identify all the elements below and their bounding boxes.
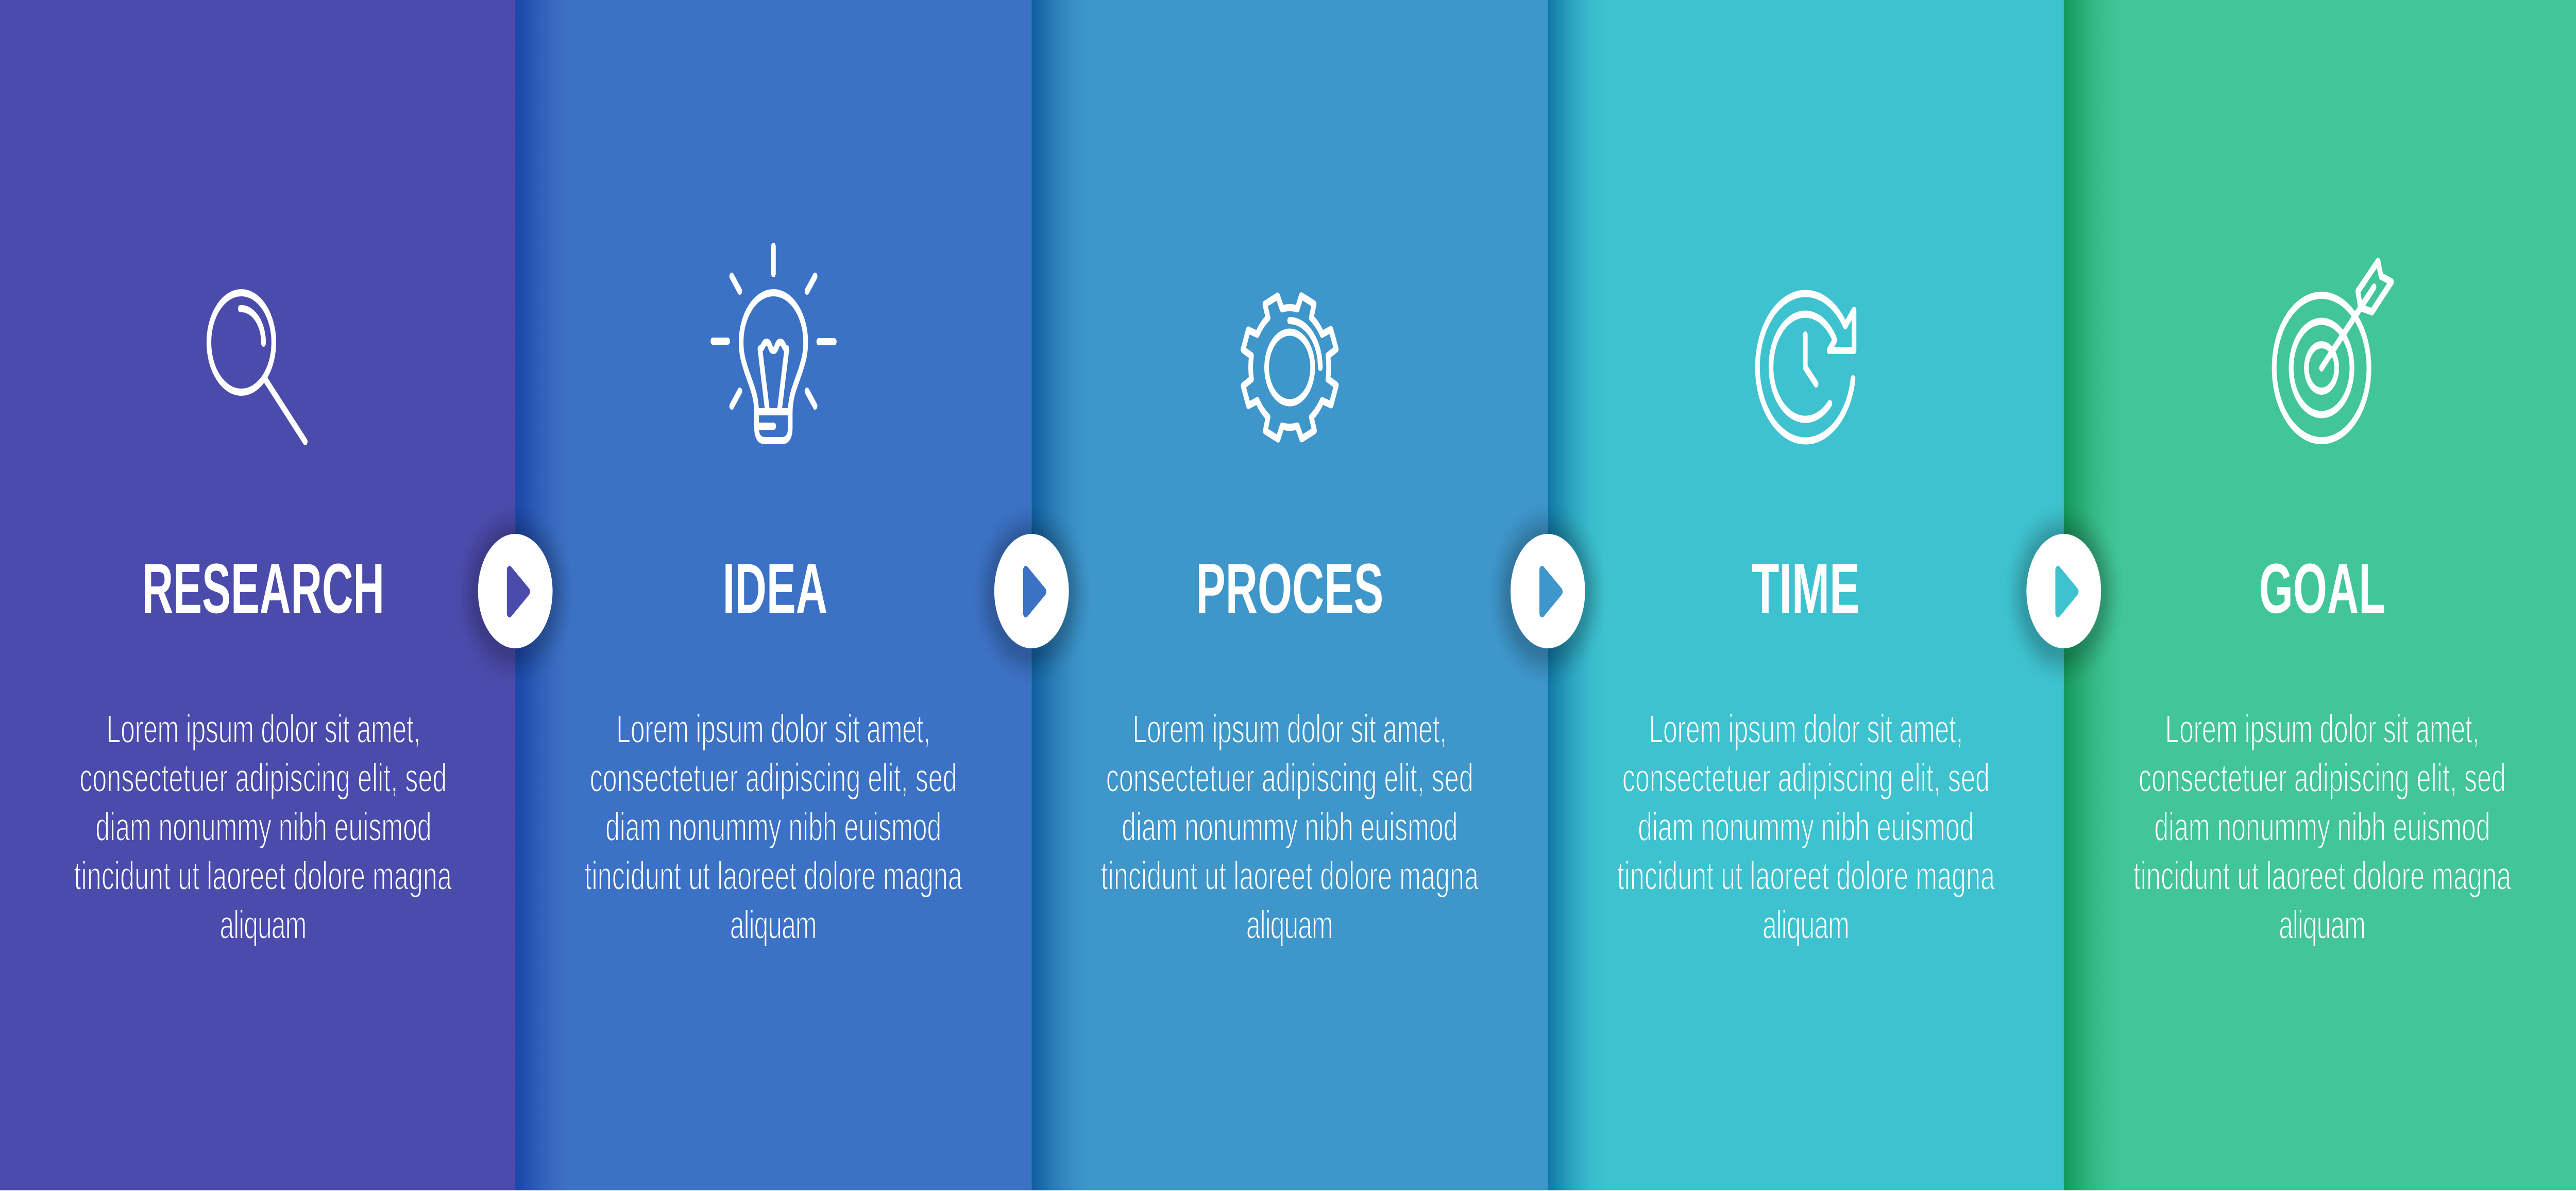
panel inner shadow: light blue [1031, 0, 1089, 1190]
panel: goal [2064, 0, 2576, 1190]
text block: research: consectetuer adipiscing elit, sed [79, 756, 447, 800]
text block: idea: aliquam [730, 902, 817, 947]
text block: time: diam nonummy nibh euismod [1638, 804, 1974, 849]
text block: time: Lorem ipsum dolor sit amet, [1649, 707, 1963, 751]
arrow button 4 [2003, 501, 2124, 687]
text block: research: tincidunt ut laoreet dolore magna [74, 853, 452, 898]
text block: goal [2133, 707, 2512, 947]
text block: proces: diam nonummy nibh euismod [1122, 804, 1458, 849]
panel inner shadow: green [2064, 0, 2121, 1190]
heading: goal: GOAL [2259, 549, 2385, 628]
arrow button 3 [1487, 501, 1608, 687]
icon: light bulb [713, 246, 834, 441]
heading: proces: PROCES [1196, 549, 1383, 628]
heading: idea: IDEA [723, 549, 827, 628]
text block: goal: Lorem ipsum dolor sit amet, [2165, 707, 2479, 751]
text block: idea: consectetuer adipiscing elit, sed [590, 756, 957, 800]
text block: time: tincidunt ut laoreet dolore magna [1617, 853, 1995, 898]
text block: idea: Lorem ipsum dolor sit amet, [616, 707, 930, 751]
panel: idea [515, 0, 1031, 1190]
text block: goal: consectetuer adipiscing elit, sed [2139, 756, 2506, 800]
panel inner shadow: cyan [1548, 0, 1605, 1190]
text block: idea: tincidunt ut laoreet dolore magna [585, 853, 962, 898]
panel background: cyan [1548, 0, 2064, 1190]
text block: goal: aliquam [2279, 902, 2366, 947]
arrow button 1 [455, 501, 576, 687]
text block: research: diam nonummy nibh euismod [95, 804, 432, 849]
icon: target with arrow [2274, 261, 2392, 441]
text block: idea: diam nonummy nibh euismod [605, 804, 941, 849]
text block: proces: aliquam [1246, 902, 1333, 947]
icon: clock with arrow [1757, 293, 1854, 441]
panel background: purple [0, 0, 515, 1190]
panel background: green [2064, 0, 2576, 1190]
icon: magnifying glass [209, 293, 305, 442]
text block: goal: diam nonummy nibh euismod [2154, 804, 2490, 849]
text block: proces: Lorem ipsum dolor sit amet, [1132, 707, 1447, 751]
text block: time: consectetuer adipiscing elit, sed [1622, 756, 1990, 800]
icon: gear [1234, 282, 1346, 453]
heading: research: RESEARCH [142, 549, 384, 628]
panel: proces [1031, 0, 1548, 1190]
panel background: blue [515, 0, 1031, 1190]
text block: proces [1101, 707, 1479, 947]
text block: research [74, 707, 452, 947]
panel: time [1548, 0, 2064, 1190]
panel: research [0, 0, 515, 1190]
text block: idea [585, 707, 962, 947]
heading: time: TIME [1752, 549, 1860, 628]
text block: time: aliquam [1762, 902, 1850, 947]
arrow button 2 [971, 501, 1092, 687]
text block: research: aliquam [219, 902, 307, 947]
text block: proces: tincidunt ut laoreet dolore magna [1101, 853, 1479, 898]
text block: proces: consectetuer adipiscing elit, sed [1106, 756, 1473, 800]
text block: time [1617, 707, 1995, 947]
panel background: light blue [1031, 0, 1548, 1190]
panel inner shadow: blue [515, 0, 572, 1190]
text block: research: Lorem ipsum dolor sit amet, [106, 707, 420, 751]
text block: goal: tincidunt ut laoreet dolore magna [2133, 853, 2512, 898]
